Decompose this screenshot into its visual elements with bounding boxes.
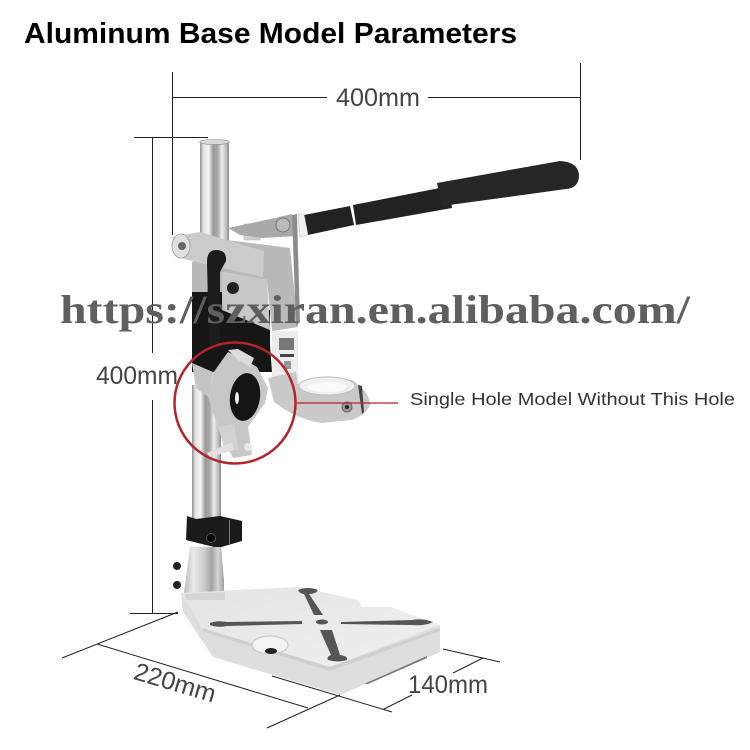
watermark url: https://szxiran.en.alibaba.com/ xyxy=(60,287,691,332)
base slots xyxy=(210,588,433,662)
dimension: top 400mm handle width: 400mm xyxy=(336,84,420,112)
column socket xyxy=(183,547,224,600)
dimension: top 400mm handle width xyxy=(172,63,580,235)
dimension label: 220mm: 220mm xyxy=(131,658,219,708)
lever handle xyxy=(300,161,579,236)
double hole clamp inside red circle xyxy=(192,349,268,458)
column upper xyxy=(200,142,229,247)
red callout circle xyxy=(174,342,296,464)
dimension label: 140mm: 140mm xyxy=(408,671,488,699)
base dimension lines xyxy=(62,612,500,728)
callout leader line xyxy=(295,402,398,404)
base plate xyxy=(181,587,440,695)
drill ring clamp xyxy=(268,372,370,423)
drill stand product xyxy=(172,140,579,695)
countersunk hole xyxy=(252,636,288,654)
black rear bracket xyxy=(192,290,272,372)
column collar xyxy=(186,516,242,548)
callout text: Single Hole Model Without This Hole xyxy=(410,389,735,409)
dimension: height 400mm: 400mm xyxy=(96,362,178,390)
head casting xyxy=(172,214,308,345)
title: Aluminum Base Model Parameters xyxy=(24,18,517,50)
side screws xyxy=(173,562,181,589)
column lower xyxy=(192,385,221,520)
label plate xyxy=(272,331,298,381)
dimension: height 400mm xyxy=(96,137,208,614)
